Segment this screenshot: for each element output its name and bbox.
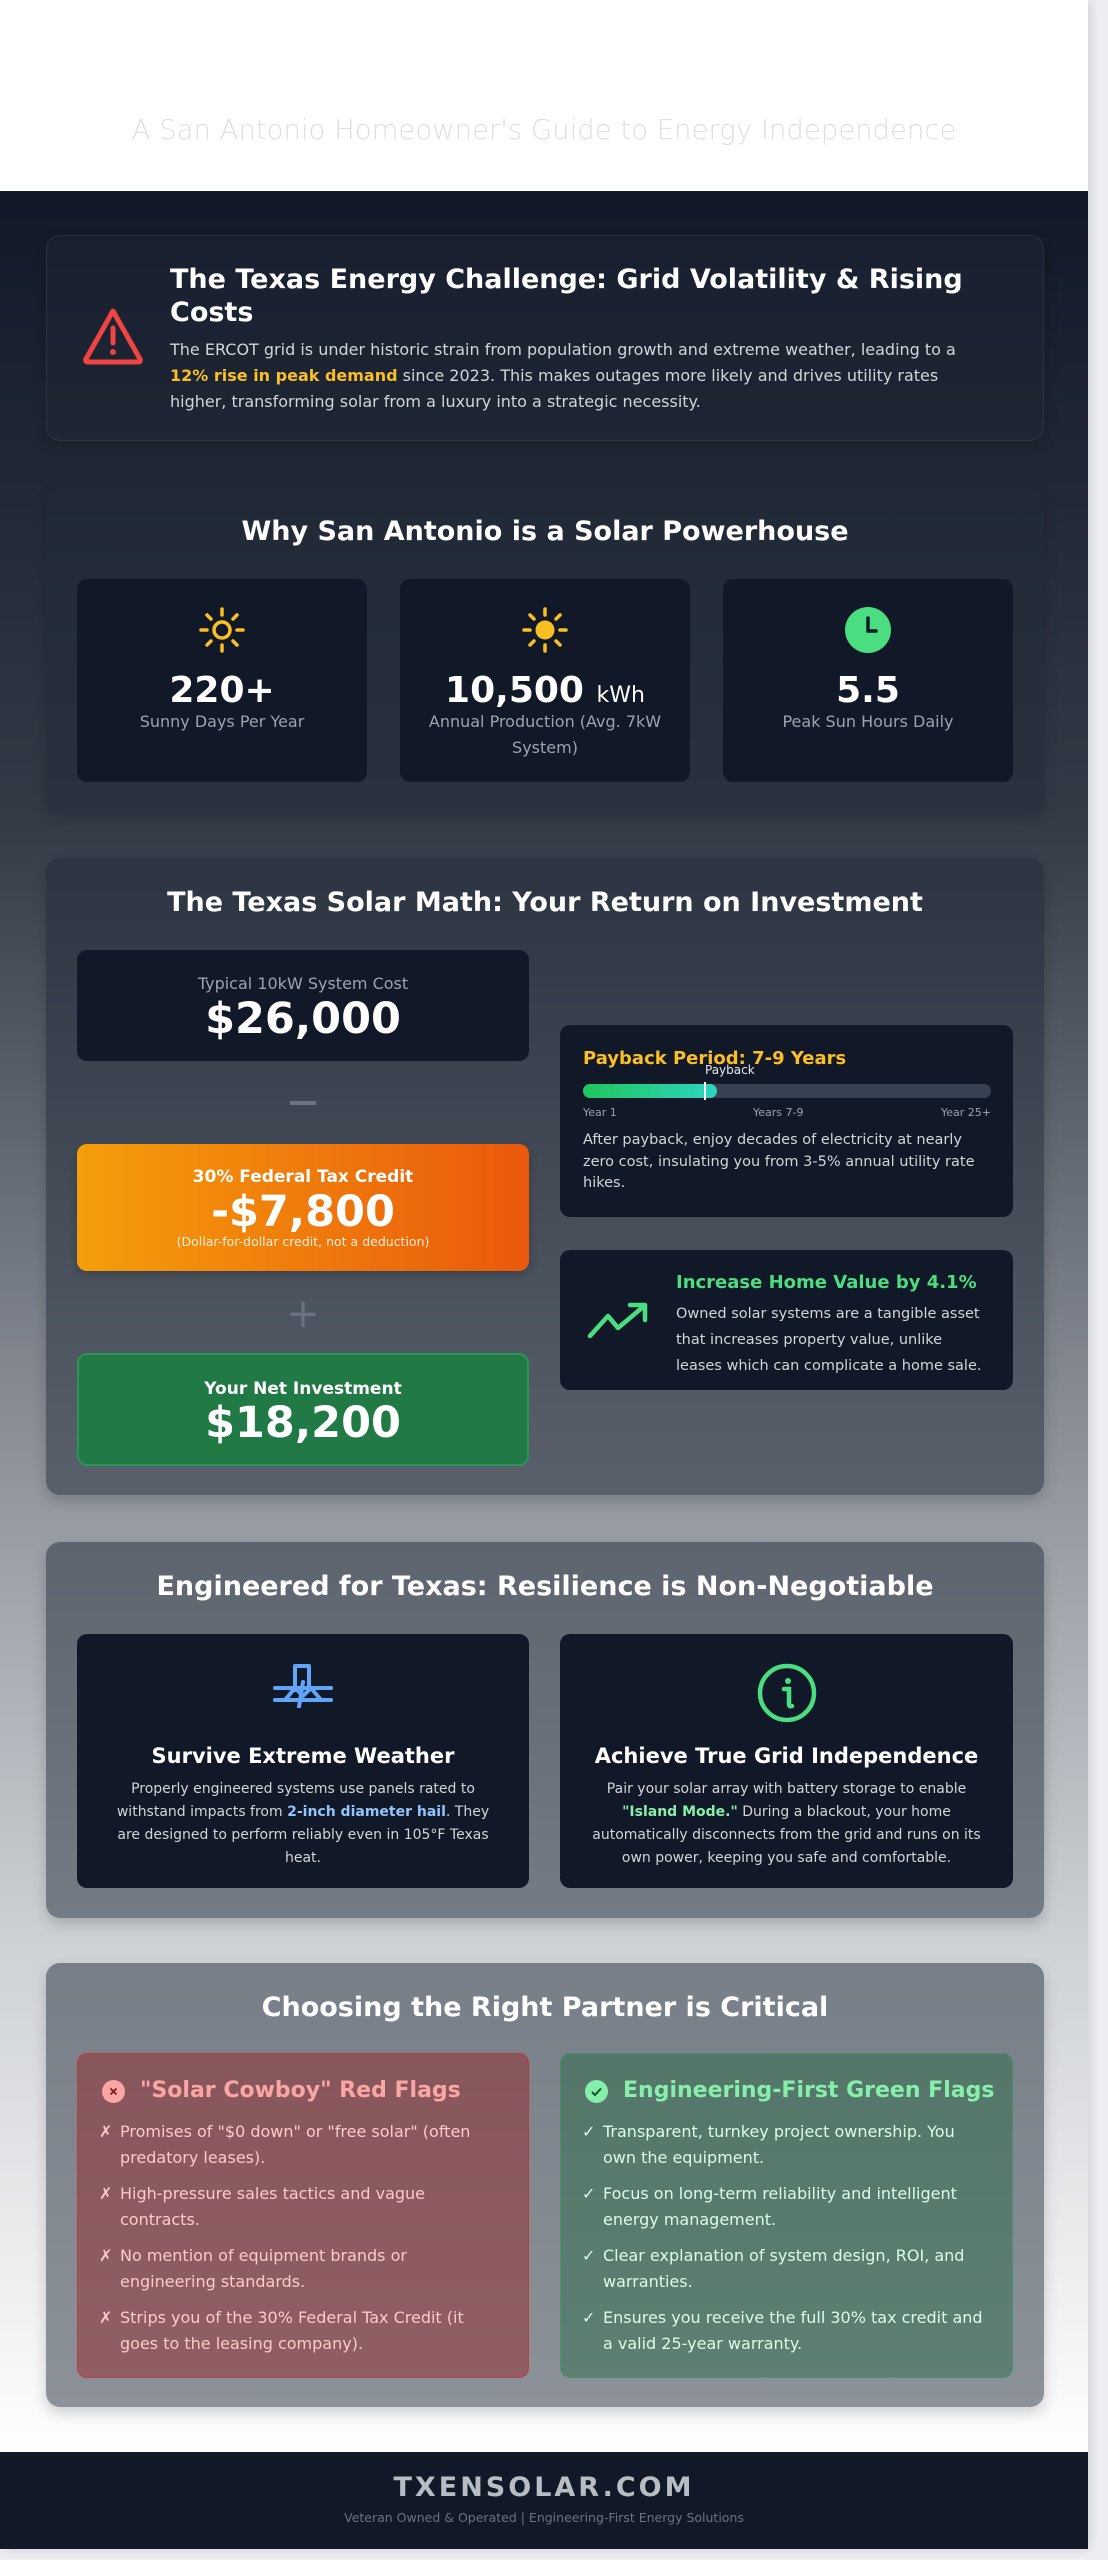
heading: Choosing the Right Partner is Critical [262, 1992, 828, 2023]
payback progress bar: Year 25+ [941, 1106, 991, 1119]
green flags list [582, 2122, 983, 2353]
green flags header [585, 2078, 994, 2103]
footer brand: TXENSOLAR.COM [394, 2472, 694, 2503]
green flags list: ✓ [582, 2122, 595, 2141]
stat value: 10,500 kWh [445, 670, 645, 711]
green flags list: ✓ [582, 2184, 595, 2203]
green flags list: ✓ [582, 2246, 595, 2265]
stat card: annual production [400, 579, 690, 782]
minus sign [290, 1101, 316, 1105]
green flags list: Transparent, turnkey project ownership. You own the equipment. [603, 2122, 955, 2167]
panel: solar math [46, 858, 1044, 1495]
stat card: sunny days [77, 579, 367, 782]
green flags list: Ensures you receive the full 30% tax credit and a valid 25-year warranty. [603, 2308, 983, 2353]
red flags list: ✗ [99, 2184, 112, 2203]
body text: The ERCOT grid is under historic strain from population growth and extreme weather, leading to a 12% rise in peak demand since 2023. This makes outages more likely and drives utility rates higher, transforming solar from a luxury into a strategic necessity. [170, 340, 956, 411]
heading: Why San Antonio is a Solar Powerhouse [241, 516, 849, 547]
payback progress bar: Payback [705, 1063, 755, 1077]
green flags box [560, 2053, 1013, 2378]
payback progress bar: Years 7-9 [753, 1106, 803, 1119]
payback text: After payback, enjoy decades of electricity at nearly zero cost, insulating you from 3-5% annual utility rate hikes. [583, 1132, 974, 1191]
card: grid independence [560, 1634, 1013, 1888]
icon: info circle [758, 1664, 816, 1722]
red flags header [102, 2078, 461, 2103]
cost box [77, 950, 529, 1061]
net investment box [77, 1353, 529, 1466]
red flags list: No mention of equipment brands or engineering standards. [120, 2246, 407, 2291]
stat label: Peak Sun Hours Daily [782, 712, 954, 731]
heading: Engineered for Texas: Resilience is Non-Negotiable [156, 1571, 934, 1602]
header subtitle: A San Antonio Homeowner's Guide to Energy Independence [132, 114, 956, 146]
plus sign: + [286, 1291, 320, 1337]
cost box: Typical 10kW System Cost [198, 974, 408, 993]
payback progress bar: Year 1 [583, 1106, 617, 1119]
panel: resilience [46, 1542, 1044, 1918]
green flags list: Focus on long-term reliability and intelligent energy management. [603, 2184, 957, 2229]
stat label: Sunny Days Per Year [140, 712, 304, 731]
heading: The Texas Solar Math: Your Return on Investment [167, 887, 923, 918]
heading: The Texas Energy Challenge: Grid Volatility & Rising Costs [170, 264, 963, 328]
icon: trending up [588, 1302, 648, 1338]
tax credit box [77, 1144, 529, 1271]
red flags list: Strips you of the 30% Federal Tax Credit (it goes to the leasing company). [120, 2308, 464, 2353]
red flags list: ✗ [99, 2122, 112, 2141]
icon: warning triangle [83, 308, 143, 364]
payback title: Payback Period: 7-9 Years [583, 1048, 846, 1069]
red flags list: High-pressure sales tactics and vague contracts. [120, 2184, 425, 2229]
red flags list [99, 2122, 470, 2353]
card title: Survive Extreme Weather [152, 1744, 454, 1768]
panel: choosing partner [46, 1963, 1044, 2407]
net investment box: $18,200 [205, 1398, 401, 1448]
footer tagline: Veteran Owned & Operated | Engineering-First Energy Solutions [344, 2510, 744, 2525]
tax credit box: 30% Federal Tax Credit [193, 1167, 413, 1187]
red flags list: ✗ [99, 2308, 112, 2327]
stat value: 5.5 [836, 670, 900, 711]
card title: Achieve True Grid Independence [595, 1744, 978, 1768]
icon: sun filled [522, 607, 568, 653]
panel: solar powerhouse [46, 488, 1044, 811]
stat value: 220+ [169, 670, 275, 711]
cost box: $26,000 [205, 994, 401, 1044]
payback progress bar [583, 1063, 991, 1119]
green flags list: Clear explanation of system design, ROI, and warranties. [603, 2246, 964, 2291]
icon: sun outline [199, 607, 245, 653]
card text: Pair your solar array with battery storage to enable "Island Mode." During a blackout, your home automatically disconnects from the grid and runs on its own power, keeping you safe and comfortable. [592, 1781, 981, 1866]
stat card: peak sun hours [723, 579, 1013, 782]
tax credit box: -$7,800 [211, 1187, 395, 1237]
net investment box: Your Net Investment [204, 1379, 402, 1399]
panel: texas energy challenge [46, 235, 1044, 441]
red flags box: "Solar Cowboy" Red Flags [140, 2078, 461, 2103]
home value card [560, 1250, 1013, 1390]
home value title: Increase Home Value by 4.1% [676, 1272, 977, 1293]
icon: hail / weather [273, 1664, 333, 1708]
card: extreme weather [77, 1634, 529, 1888]
stat label: Annual Production (Avg. 7kW System) [429, 712, 661, 757]
red flags box [77, 2053, 529, 2378]
icon: clock [845, 607, 891, 653]
red flags list: Promises of "$0 down" or "free solar" (often predatory leases). [120, 2122, 470, 2167]
home value text: Owned solar systems are a tangible asset that increases property value, unlike leases which can complicate a home sale. [676, 1306, 982, 1374]
footer [0, 2452, 1088, 2549]
card text: Properly engineered systems use panels rated to withstand impacts from 2-inch diameter hail. They are designed to perform reliably even in 105°F Texas heat. [117, 1781, 489, 1866]
payback card [560, 1025, 1013, 1217]
green flags box: Engineering-First Green Flags [623, 2078, 994, 2103]
tax credit box: (Dollar-for-dollar credit, not a deduction) [177, 1234, 429, 1249]
green flags list: ✓ [582, 2308, 595, 2327]
red flags list: ✗ [99, 2246, 112, 2265]
